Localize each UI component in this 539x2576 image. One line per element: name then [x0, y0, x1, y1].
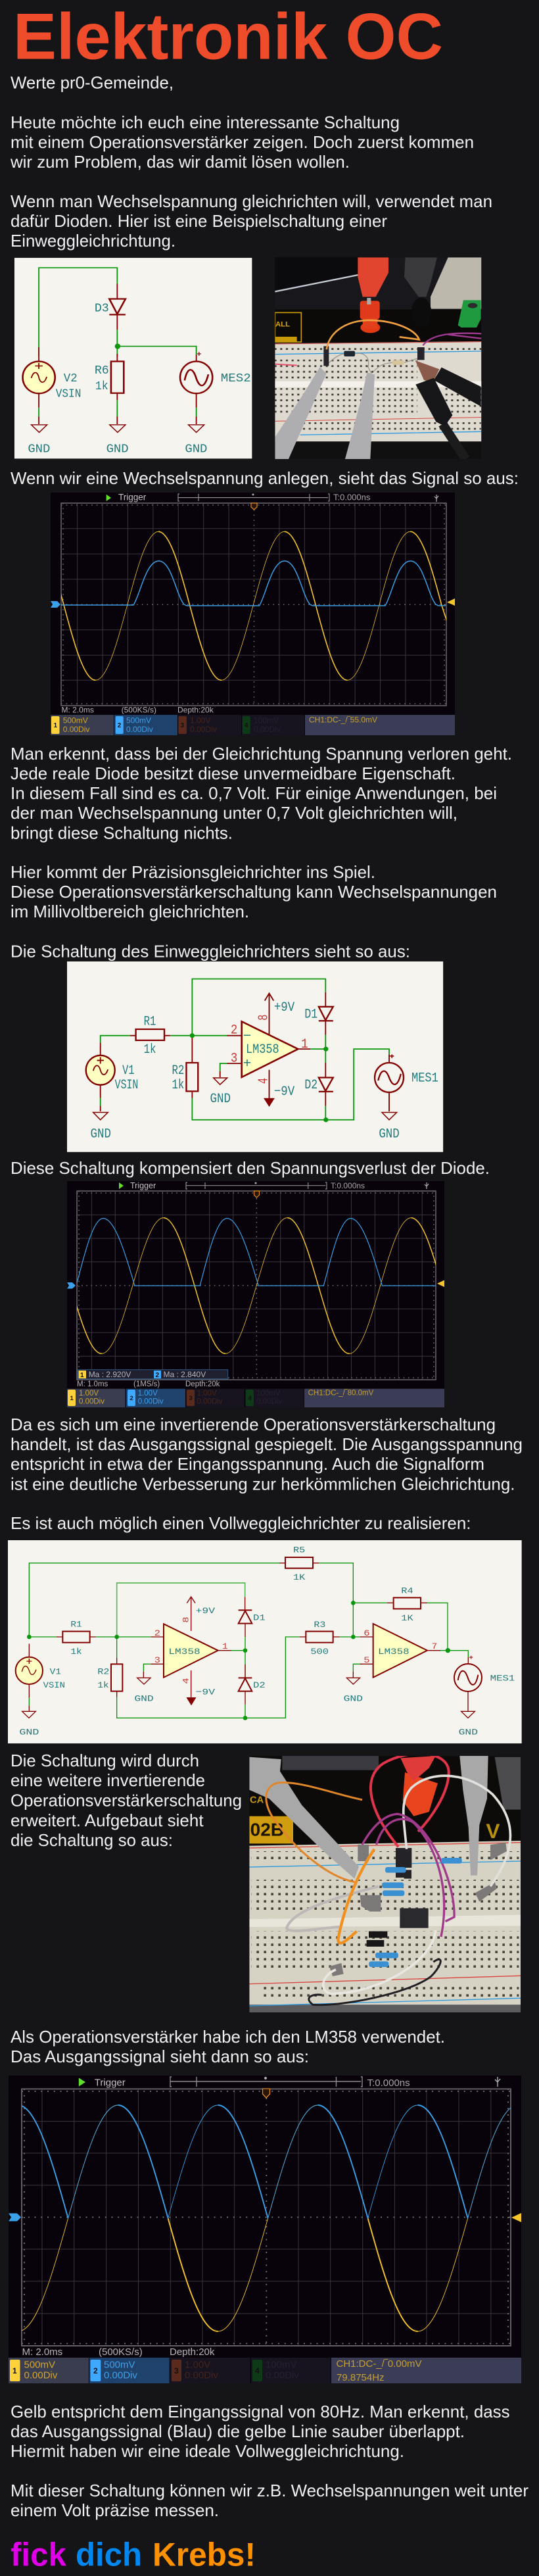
- schematic labels: −9V: [196, 1688, 215, 1698]
- trigger header: [106, 492, 438, 502]
- grey wire: [287, 1886, 379, 1931]
- title: Elektronik OC: [13, 0, 443, 72]
- acquisition info: [77, 1380, 220, 1388]
- breadboard: [275, 341, 481, 441]
- trigger header: Trigger: [118, 492, 147, 502]
- text block: diode voltage loss: In diesem Fall sind es ca. 0,7 Volt. Für einige Anwendungen, bei: [11, 783, 497, 803]
- logo plate: 02B: [250, 1820, 284, 1840]
- channel 2 ground marker: [9, 2214, 21, 2222]
- schematic labels: GND: [379, 1127, 400, 1142]
- resistors R1 R2: [136, 1029, 198, 1091]
- text block: intro: [10, 72, 492, 251]
- schematic labels: R1: [144, 1015, 156, 1029]
- schematic labels: D1: [253, 1613, 266, 1623]
- channel status bar: 0.00Div: [138, 1398, 164, 1406]
- acquisition info: (500KS/s): [99, 2346, 143, 2358]
- schematic labels: 4: [182, 1678, 192, 1684]
- oscilloscope screenshot 2: [39, 1181, 444, 1407]
- text block: intro: dafür Dioden. Hier ist eine Beispielschaltung einer: [11, 211, 387, 231]
- ground symbols: [32, 425, 204, 432]
- text block: inverting op amp: [11, 1415, 523, 1533]
- schematic labels: V1: [122, 1063, 134, 1079]
- text block: inverting op amp: ist eine deutliche Verbesserung zur herkömmlichen Gleichrichtung.: [11, 1474, 515, 1494]
- channel status bar: 3: [174, 2366, 179, 2375]
- schematic labels: 1k: [144, 1042, 156, 1057]
- schematic labels: GND: [28, 442, 50, 456]
- purple wires: [362, 1814, 454, 1937]
- acquisition info: Depth:20k: [177, 706, 214, 715]
- channel status bar: 100mV: [254, 716, 279, 725]
- logo plate: CA: [250, 1795, 264, 1806]
- blue channel trace: [61, 561, 446, 606]
- components: diode and resistor: [327, 351, 419, 374]
- power rails: [265, 993, 273, 1106]
- channel status bar: 0.00Div: [104, 2370, 137, 2381]
- channel status bar: 0.00Div: [79, 1398, 105, 1406]
- text block: second stage: Operationsverstärkerschaltung: [11, 1790, 242, 1810]
- channel status bar: CH1:DC-_/‾0.00mV: [337, 2358, 422, 2369]
- text block: intro: Werte pr0-Gemeinde,: [11, 72, 174, 92]
- schematic labels: +9V: [196, 1607, 215, 1616]
- text block: inverting op amp: entspricht in etwa der Eingangsspannung. Auch die Signalform: [11, 1454, 484, 1474]
- measurement box: Ma : 2.920V: [89, 1370, 131, 1379]
- source V2: [23, 362, 55, 393]
- text block: second stage: erweitert. Aufgebaut sieht: [11, 1810, 204, 1830]
- yellow channel trace: [77, 1217, 436, 1354]
- trigger level arrow: [437, 1280, 444, 1287]
- trigger header: T:0.000ns: [333, 493, 371, 502]
- IC LM358: [400, 1908, 429, 1928]
- schematic labels: 6: [363, 1629, 370, 1639]
- schematic labels: 1k: [172, 1078, 184, 1093]
- schematic labels: D2: [304, 1078, 317, 1093]
- text block: diode voltage loss: Diese Operationsverstärkerschaltung kann Wechselspannungen: [11, 882, 497, 902]
- measurement box: [78, 1370, 228, 1379]
- binding post green: [458, 300, 481, 328]
- probe clip black: [404, 257, 437, 297]
- power rails: [187, 1597, 195, 1705]
- text block: diode voltage loss: bringt diese Schaltung nichts.: [11, 823, 233, 843]
- resistor R6: [111, 362, 124, 393]
- probe clip red: [358, 257, 388, 297]
- meter MES1: [375, 1054, 404, 1092]
- schematic labels: 8: [256, 1015, 271, 1021]
- text: LM358 used: Das Ausgangssignal sieht dann so aus:: [11, 2047, 309, 2066]
- acquisition info: Depth:20k: [170, 2346, 215, 2358]
- op amp LM358: [242, 1021, 298, 1077]
- schematic labels: GND: [19, 1728, 39, 1738]
- channel status bar: 4: [255, 2366, 260, 2375]
- schematic labels: V1: [50, 1668, 61, 1678]
- channel status bar: 1.00V: [197, 1390, 217, 1397]
- text: compensation: Diese Schaltung kompensiert den Spannungsverlust der Diode.: [11, 1158, 490, 1178]
- photo: full-wave rectifier on breadboard: [249, 1754, 521, 2012]
- schematic labels: VSIN: [43, 1681, 65, 1691]
- acquisition info: [22, 2346, 215, 2358]
- sign-off: [11, 2536, 256, 2573]
- circuit diagram: precision half-wave rectifier: [67, 961, 443, 1152]
- diodes D1 D2: [319, 1007, 333, 1092]
- schematic labels: 3: [154, 1656, 160, 1666]
- measurement box: 2: [155, 1372, 159, 1379]
- schematic labels: 1K: [293, 1573, 305, 1583]
- text block: conclusion: Gelb entspricht dem Eingangssignal von 80Hz. Man erkennt, dass: [11, 2402, 510, 2421]
- text block: conclusion: einem Volt präzise messen.: [11, 2500, 219, 2520]
- diodes D1 D2: [239, 1610, 252, 1691]
- diodes: [367, 1932, 387, 1947]
- trigger header: Trigger: [95, 2077, 126, 2089]
- schematic labels: GND: [106, 442, 129, 456]
- icon: diode D3: [109, 299, 126, 314]
- meter MES1: [454, 1656, 482, 1691]
- text block: intro: Wenn man Wechselspannung gleichrichten will, verwendet man: [11, 191, 492, 211]
- channel status bar: 0.00Div: [197, 1398, 223, 1406]
- schematic labels: GND: [459, 1728, 478, 1738]
- trigger level arrow: [447, 598, 455, 606]
- grey probes: [275, 367, 375, 459]
- text block: diode voltage loss: Die Schaltung des Einweggleichrichters sieht so aus:: [11, 942, 410, 961]
- text block: second stage: die Schaltung so aus:: [11, 1830, 173, 1850]
- trigger marker: [251, 503, 257, 510]
- schematic labels: 5: [363, 1656, 370, 1666]
- schematic labels: GND: [210, 1092, 231, 1107]
- schematic labels: LM358: [168, 1647, 200, 1657]
- schematic labels: D2: [253, 1681, 266, 1691]
- text block: second stage: [11, 1751, 242, 1850]
- text block: intro: Einweggleichrichtung.: [11, 231, 176, 251]
- oscilloscope screenshot 3: [9, 2076, 521, 2383]
- schematic labels: 7: [432, 1642, 437, 1652]
- channel status bar: 0.00Div: [185, 2370, 218, 2381]
- schematic labels: [91, 1000, 438, 1142]
- channel status bar: 100mV: [266, 2360, 297, 2371]
- jumper connectors: [396, 1848, 411, 1879]
- schematic labels: V2: [64, 372, 78, 385]
- schematic labels: −: [243, 1029, 251, 1044]
- text block: inverting op amp: handelt, ist das Ausgangssignal gespiegelt. Die Ausgangsspannung: [11, 1434, 523, 1454]
- grid: [22, 2089, 511, 2346]
- source V1: [16, 1657, 43, 1684]
- schematic labels: +: [243, 1057, 251, 1072]
- ground symbols: [93, 1078, 397, 1120]
- binding post black: [411, 297, 431, 309]
- trigger level arrow: [511, 2213, 521, 2222]
- resistors: [369, 1858, 462, 1967]
- orange wire: [327, 320, 419, 349]
- blue channel trace: [76, 1219, 436, 1286]
- grid: [61, 503, 446, 706]
- logo plate: [275, 312, 301, 342]
- schematic labels: LM358: [246, 1042, 279, 1057]
- logo plate: ALL: [275, 320, 290, 328]
- acquisition info: M: 2.0ms: [22, 2346, 62, 2358]
- sign-off: Krebs!: [152, 2536, 256, 2573]
- channel status bar: 3: [180, 722, 184, 729]
- text block: second stage: Die Schaltung wird durch: [11, 1751, 199, 1770]
- text block: intro: Heute möchte ich euch eine interessante Schaltung: [11, 112, 400, 132]
- schematic labels: MES2: [221, 372, 251, 385]
- schematic labels: 2: [231, 1023, 237, 1038]
- trigger header: T:0.000ns: [331, 1181, 365, 1190]
- junctions: [190, 1033, 328, 1122]
- text block: inverting op amp: Es ist auch möglich einen Vollweggleichrichter zu realisieren:: [11, 1513, 471, 1533]
- schematic labels: −9V: [274, 1084, 295, 1100]
- schematic labels: R2: [97, 1668, 109, 1678]
- schematic labels: 8: [182, 1616, 192, 1623]
- text block: intro: mit einem Operationsverstärker zeigen. Doch zuerst kommen: [11, 132, 474, 152]
- text: signal intro: Wenn wir eine Wechselspannung anlegen, sieht das Signal so aus:: [11, 468, 519, 488]
- orange wires: [266, 1782, 362, 1882]
- purple wires: [423, 333, 481, 345]
- channel status bar: 1.00V: [79, 1390, 99, 1397]
- acquisition info: (500KS/s): [122, 706, 156, 715]
- acquisition info: (1MS/s): [133, 1380, 160, 1388]
- logo plate: V: [486, 1819, 500, 1843]
- text: LM358 used: Als Operationsverstärker habe ich den LM358 verwendet.: [11, 2027, 445, 2047]
- text: LM358 used: [11, 2027, 445, 2066]
- logo plate: [249, 1795, 500, 1843]
- trigger marker: [254, 1191, 259, 1198]
- text block: conclusion: das Ausgangssignal (Blau) die gelbe Linie sauber überlappt.: [11, 2421, 465, 2441]
- channel status bar: 0.00Div: [256, 1398, 282, 1406]
- acquisition info: [62, 706, 214, 715]
- schematic labels: MES1: [490, 1674, 515, 1684]
- yellow channel trace: [18, 2105, 518, 2331]
- schematic labels: 2: [154, 1629, 160, 1639]
- channel status bar: 2: [118, 722, 122, 729]
- channel status bar: 1.00V: [185, 2360, 210, 2371]
- schematic labels: 3: [231, 1052, 237, 1066]
- jumper connectors: [323, 346, 425, 366]
- schematic labels: R2: [172, 1063, 184, 1079]
- schematic labels: VSIN: [56, 387, 81, 401]
- schematic labels: GND: [185, 442, 207, 456]
- channel status bar: 0.00Div: [266, 2370, 299, 2381]
- channel status bar: [9, 2358, 521, 2383]
- schematic labels: [19, 1546, 515, 1738]
- oscilloscope screenshot 1: [33, 492, 455, 735]
- channel status bar: 0.00Div: [63, 725, 89, 734]
- schematic labels: R3: [314, 1620, 325, 1630]
- schematic labels: D1: [304, 1008, 317, 1023]
- schematic labels: 1k: [70, 1647, 82, 1657]
- trigger header: T:0.000ns: [367, 2078, 410, 2089]
- text block: diode voltage loss: Hier kommt der Präzisionsgleichrichter ins Spiel.: [11, 862, 375, 882]
- channel 2 ground marker: [51, 601, 60, 608]
- channel status bar: 0.00Div: [254, 725, 281, 734]
- red wire: [371, 1754, 449, 1847]
- schematic labels: GND: [91, 1127, 111, 1142]
- binding post red: [360, 298, 380, 333]
- trigger header: Trigger: [130, 1181, 156, 1190]
- schematic labels: R6: [95, 364, 109, 377]
- sign-off: dich: [76, 2536, 142, 2573]
- junctions: [27, 1601, 450, 1720]
- channel status bar: 500mV: [126, 716, 151, 725]
- schematic labels: 500: [310, 1647, 329, 1657]
- channel status bar: [67, 1389, 444, 1407]
- measurement box: 1: [80, 1372, 84, 1379]
- channel status bar: CH1:DC-_/‾80.0mV: [308, 1390, 374, 1397]
- schematic labels: GND: [344, 1695, 363, 1705]
- text block: inverting op amp: Da es sich um eine invertierende Operationsverstärkerschaltung: [11, 1415, 496, 1434]
- source V1: [86, 1056, 115, 1085]
- circuit diagram: full-wave rectifier: [8, 1540, 522, 1743]
- text block: diode voltage loss: Man erkennt, dass bei der Gleichrichtung Spannung verloren geht.: [11, 744, 512, 764]
- channel status bar: 1.00V: [190, 716, 210, 725]
- resistors: [62, 1557, 421, 1691]
- acquisition info: M: 2.0ms: [62, 706, 94, 715]
- channel status bar: 3: [189, 1395, 193, 1402]
- pink wire: [275, 364, 297, 366]
- channel status bar: 0.00Div: [190, 725, 217, 734]
- schematic labels: LM358: [378, 1647, 410, 1657]
- black alligator clips: [415, 360, 481, 459]
- channel status bar: 1.00V: [138, 1390, 158, 1397]
- channel status bar: 0.00Div: [126, 725, 153, 734]
- trigger header: [119, 1181, 429, 1190]
- text block: diode voltage loss: [11, 744, 512, 961]
- channel status bar: 500mV: [104, 2360, 135, 2371]
- acquisition info: M: 1.0ms: [77, 1380, 108, 1388]
- channel 2 ground marker: [67, 1282, 76, 1289]
- red post: [403, 1772, 438, 1816]
- schematic labels: 1k: [95, 379, 108, 393]
- channel status bar: 4: [248, 1395, 252, 1402]
- channel status bar: 1: [12, 2366, 17, 2375]
- channel status bar: 100mV: [256, 1390, 281, 1397]
- schematic labels: 1: [222, 1642, 228, 1652]
- black wire: [309, 1959, 440, 2005]
- measurement box: Ma : 2.840V: [163, 1370, 206, 1379]
- text block: conclusion: Mit dieser Schaltung können wir z.B. Wechselspannungen weit unter: [11, 2481, 528, 2500]
- schematic labels: R1: [70, 1620, 82, 1630]
- white wire lower: [323, 1930, 436, 1994]
- text block: conclusion: Hiermit haben wir eine ideale Vollweggleichrichtung.: [11, 2441, 404, 2461]
- schematic labels: MES1: [411, 1071, 438, 1086]
- channel status bar: [51, 715, 455, 735]
- yellow channel trace: [33, 531, 447, 680]
- channel status bar: CH1:DC-_/‾55.0mV: [309, 716, 377, 725]
- text block: intro: wir zum Problem, das wir damit lösen wollen.: [10, 152, 350, 172]
- blue channel trace: [18, 2105, 518, 2218]
- channel status bar: 1: [70, 1395, 74, 1402]
- junction: [115, 343, 120, 349]
- text block: diode voltage loss: im Millivoltbereich gleichrichten.: [11, 902, 249, 921]
- component upper right: [495, 1757, 521, 1810]
- channel status bar: 2: [93, 2366, 98, 2375]
- text block: conclusion: [11, 2402, 528, 2520]
- scope probes: [249, 1756, 488, 1879]
- breadboard: [249, 1841, 521, 2012]
- schematic labels: [28, 301, 251, 456]
- channel status bar: 79.8754Hz: [337, 2372, 385, 2383]
- photo: breadboard with diode and resistor: [275, 257, 481, 459]
- schematic labels: 1: [301, 1037, 308, 1052]
- channel status bar: 4: [245, 722, 248, 729]
- trigger header: [79, 2077, 500, 2089]
- circuit diagram: half-wave diode rectifier: [14, 258, 252, 458]
- schematic labels: D3: [95, 301, 109, 315]
- schematic labels: R4: [401, 1587, 413, 1597]
- schematic labels: 4: [256, 1078, 271, 1084]
- text block: second stage: eine weitere invertierende: [11, 1770, 205, 1790]
- text block: diode voltage loss: der man Wechselspannung unter 0,7 Volt gleichrichten will,: [11, 803, 457, 823]
- schematic labels: GND: [134, 1695, 154, 1705]
- channel status bar: 2: [130, 1395, 133, 1402]
- op amps: [164, 1624, 427, 1678]
- channel status bar: 500mV: [63, 716, 88, 725]
- channel status bar: 0.00Div: [24, 2370, 58, 2381]
- schematic labels: 1K: [401, 1614, 413, 1624]
- schematic labels: 1k: [97, 1681, 109, 1691]
- acquisition info: Depth:20k: [185, 1380, 220, 1388]
- white wire upper: [404, 1776, 510, 1886]
- grid: [77, 1191, 436, 1380]
- channel status bar: 500mV: [24, 2360, 55, 2371]
- channel status bar: 1: [54, 722, 58, 729]
- schematic labels: +9V: [274, 1000, 295, 1015]
- ground symbols: [22, 1678, 475, 1718]
- schematic labels: VSIN: [115, 1078, 138, 1093]
- meter MES2: [180, 352, 212, 393]
- sign-off: fick: [11, 2536, 66, 2573]
- schematic labels: R5: [293, 1546, 305, 1556]
- trigger marker: [263, 2089, 270, 2098]
- text block: diode voltage loss: Jede reale Diode besitzt diese unvermeidbare Eigenschaft.: [11, 764, 456, 783]
